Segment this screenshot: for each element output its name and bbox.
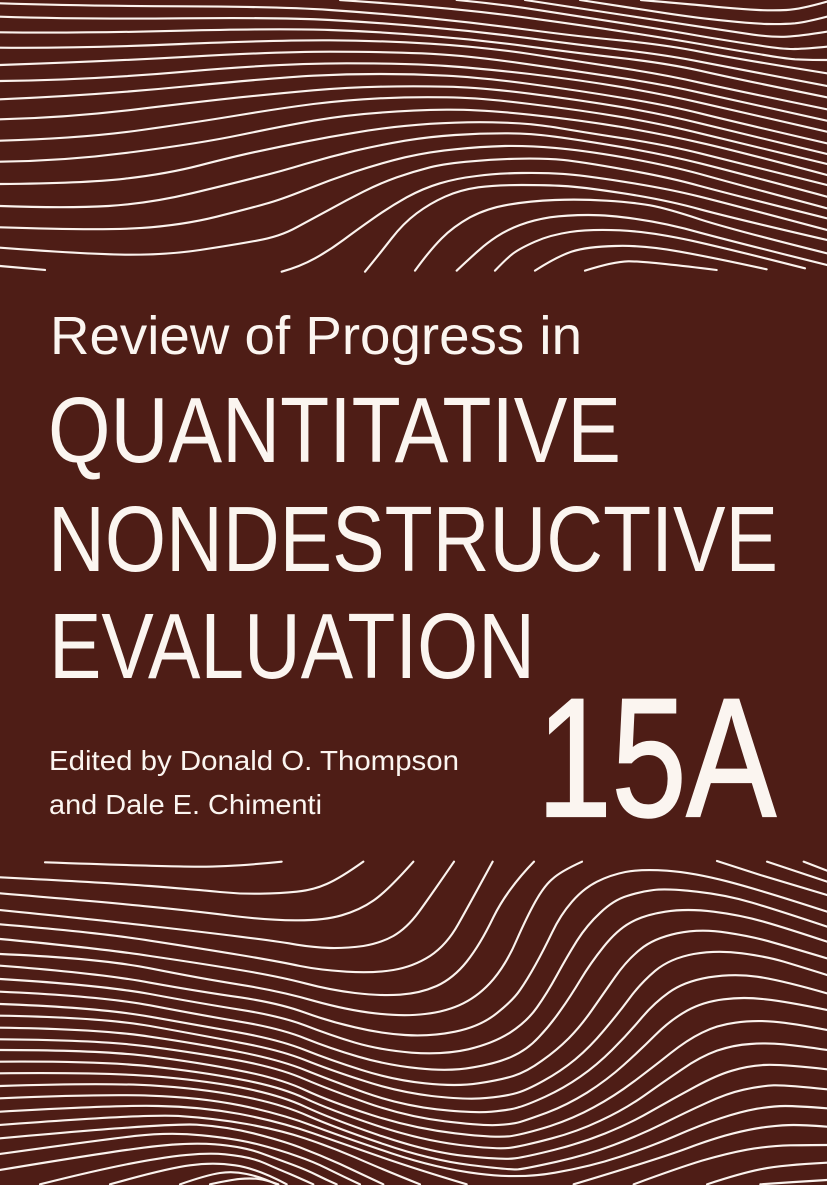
editors line 1: Edited by Donald O. Thompson xyxy=(49,745,459,776)
title: EVALUATION: EVALUATION xyxy=(49,594,535,698)
top wave line pattern xyxy=(0,0,827,272)
editors line 2: and Dale E. Chimenti xyxy=(49,789,322,820)
title: QUANTITATIVE: QUANTITATIVE xyxy=(48,378,621,482)
heading: Review of Progress in: Review of Progress in xyxy=(50,306,582,366)
bottom wave line pattern xyxy=(0,861,827,1184)
